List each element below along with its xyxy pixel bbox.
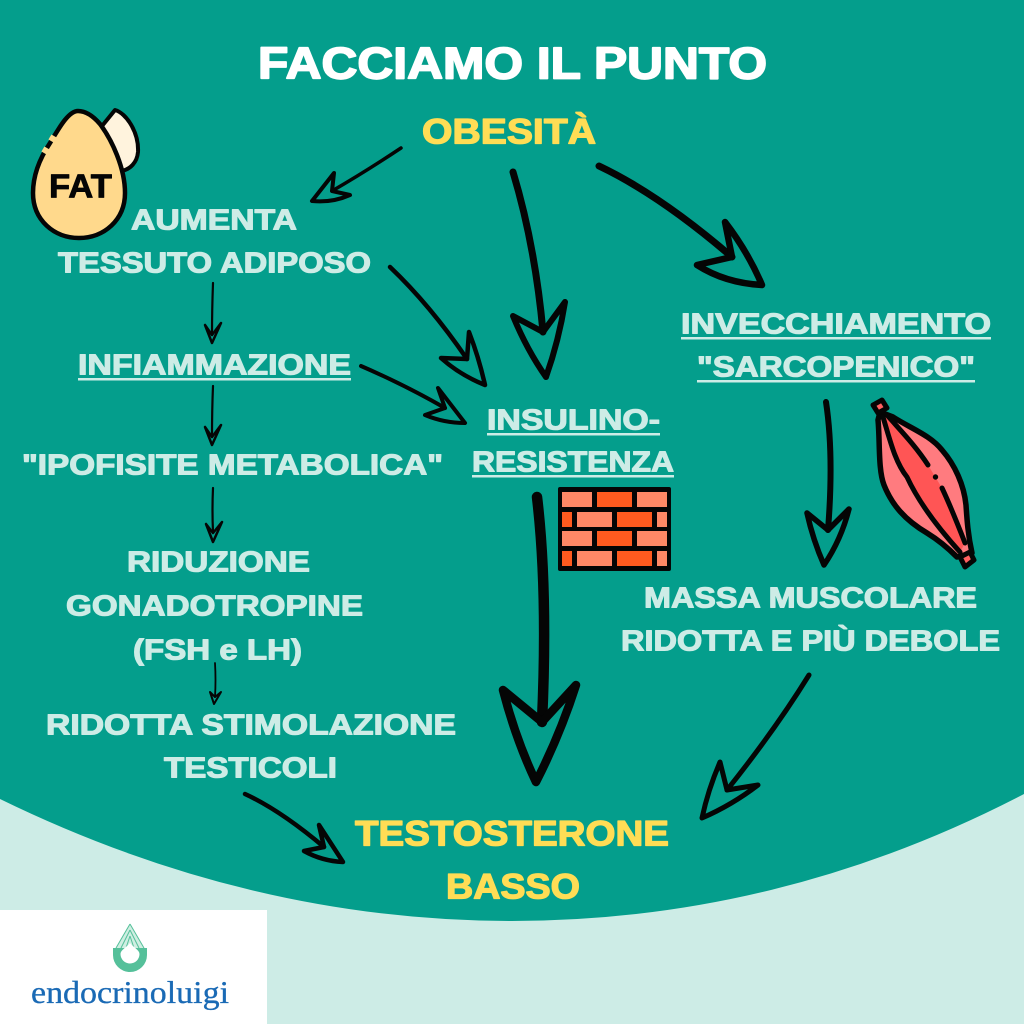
heading: obesity: OBESITÀ [422, 112, 596, 152]
text: ridotta stimolazione testicoli: TESTICOLI [164, 752, 337, 784]
text: aumenta tessuto adiposo [58, 204, 371, 280]
text: ridotta stimolazione testicoli [46, 710, 456, 784]
text: aumenta tessuto adiposo: AUMENTA [131, 204, 297, 236]
logo: endocrinoluigi [0, 910, 267, 1024]
text: riduzione gonadotropine: (FSH e LH) [133, 634, 302, 666]
arrow: muscle mass to low testosterone [702, 675, 809, 818]
heading: testosterone basso: BASSO [446, 866, 580, 906]
arrow: hypophysitis to gonadotropins [206, 488, 222, 542]
arrow: adipose to inflammation [205, 283, 221, 343]
text: insulino-resistenza [472, 404, 674, 478]
text: riduzione gonadotropine: GONADOTROPINE [66, 590, 363, 622]
arrow: obesity to adipose [312, 148, 401, 201]
icon: fat drops: FAT [49, 168, 112, 204]
heading: testosterone basso [355, 814, 669, 906]
arrow: obesity to sarcopenic aging [599, 166, 762, 285]
text: massa muscolare [621, 582, 1000, 658]
arrow: sarcopenic to muscle mass [807, 402, 849, 565]
arrow: inflammation to hypophysitis [205, 386, 221, 445]
arrow: obesity to insulin resistance [513, 172, 565, 377]
text: riduzione gonadotropine: RIDUZIONE [127, 546, 310, 578]
light background curve [0, 794, 1024, 1024]
text: aumenta tessuto adiposo: TESSUTO ADIPOSO [58, 248, 371, 280]
text: massa muscolare: MASSA MUSCOLARE [644, 582, 977, 614]
logo: endocrinoluigi: endocrinoluigi [31, 974, 229, 1010]
arrow: insulin resistance to low testosterone [503, 497, 576, 782]
icon: muscle [873, 400, 974, 567]
text: invecchiamento sarcopenico: INVECCHIAMENTO [681, 308, 991, 340]
text: insulino-resistenza: INSULINO- [487, 404, 660, 436]
text: invecchiamento sarcopenico: "SARCOPENICO" [697, 352, 975, 384]
icon: fat drops [33, 110, 138, 238]
text: ridotta stimolazione testicoli: RIDOTTA STIMOLAZIONE [46, 710, 456, 742]
arrow: inflammation to insulin resistance [361, 366, 465, 423]
text: insulino-resistenza: RESISTENZA [472, 446, 674, 478]
icon: brick wall [558, 487, 671, 571]
icon: logo drop [113, 924, 147, 972]
text: infiammazione: INFIAMMAZIONE [78, 350, 351, 382]
arrow: testicles to low testosterone [245, 794, 343, 862]
text: riduzione gonadotropine [66, 546, 363, 666]
text: massa muscolare: RIDOTTA E PIÙ DEBOLE [621, 626, 1000, 658]
heading: testosterone basso: TESTOSTERONE [355, 814, 669, 854]
arrow: adipose to insulin resistance [390, 267, 485, 385]
text: ipofisite metabolica: "IPOFISITE METABOLICA" [22, 450, 443, 482]
text: invecchiamento sarcopenico [681, 308, 991, 384]
title: FACCIAMO IL PUNTO [258, 40, 767, 88]
arrow: gonadotropins to stimulation [210, 663, 221, 704]
